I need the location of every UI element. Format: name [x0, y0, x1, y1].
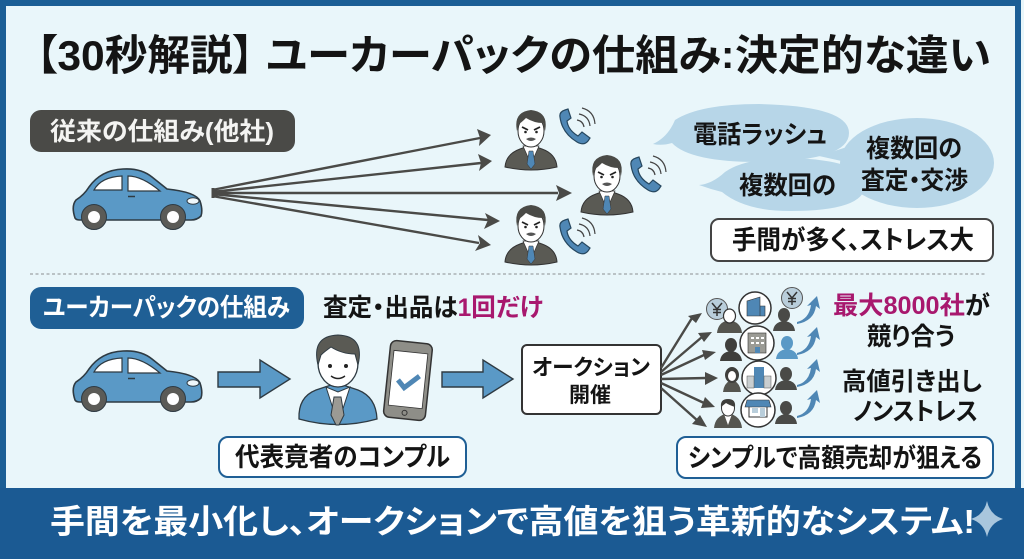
icon: rising arrow [797, 359, 820, 387]
title: 決定的な違い [735, 32, 991, 79]
icon: rising arrow [797, 390, 820, 418]
icon: office building [739, 292, 771, 324]
arrows: to many dealers [212, 129, 572, 251]
callout: troublesome and stressful [711, 219, 993, 261]
speech bubble: multiple appraisals and negotiation: 複数回の [866, 135, 962, 163]
title: 【30秒解説】 [36, 32, 254, 79]
callout: representative [219, 437, 466, 477]
icon: phone 1 [560, 108, 595, 144]
buyers row 1 [706, 288, 820, 333]
bottom banner [0, 488, 1024, 559]
icon: stressed sales person 1 [505, 110, 557, 170]
icon: office building [740, 326, 774, 360]
heading pill: Ucar-Pack system [30, 287, 304, 329]
panel: Ucar-Pack system [30, 287, 993, 478]
icon: car [73, 169, 202, 230]
icon: buyer silhouette blue [776, 336, 798, 359]
text: up to 8000 companies compete: 競り合う [867, 323, 955, 351]
icon: buyer silhouette [773, 308, 795, 331]
icon: buyer silhouette [775, 367, 797, 390]
subheading: one-time appraisal: 査定・出品は1回だけ [323, 294, 543, 322]
icon: smartphone with check [383, 340, 433, 421]
icon: yen coin [706, 298, 728, 320]
icon: smiling agent [299, 335, 377, 425]
auction box: オークション [532, 355, 650, 380]
icon: rising arrow [797, 296, 820, 324]
arrow: agent to auction [442, 360, 513, 398]
bottom banner: 手間を最小化し、オークションで高値を狙う革新的なシステム! [50, 503, 975, 540]
icon: rising arrow [797, 327, 820, 355]
heading pill: Ucar-Pack system: ユーカーパックの仕組み [43, 294, 290, 322]
speech bubble: multiple appraisals and negotiation: 査定・交渉 [861, 167, 968, 195]
heading pill: conventional [30, 110, 295, 152]
icon: stressed sales person 2 [581, 155, 633, 215]
icon: sparkle [971, 501, 1003, 537]
speech bubble: phone rush [653, 104, 849, 162]
icon: suited buyer [714, 399, 742, 428]
speech bubble: phone rush: 電話ラッシュ [693, 121, 827, 149]
icon: car [73, 351, 202, 412]
icon: phone 2 [631, 156, 666, 192]
buyers row 3 [723, 359, 820, 395]
arrows: auction to buyers [661, 313, 718, 427]
icon: buyer silhouette [720, 338, 742, 361]
icon: buyer silhouette [775, 401, 797, 424]
callout: troublesome and stressful: 手間が多く、ストレス大 [732, 225, 974, 255]
title [36, 32, 991, 79]
buyers row 2 [720, 326, 820, 361]
text: high price, no stress: ノンストレス [853, 398, 978, 426]
icon: woman buyer [723, 367, 741, 392]
heading pill: conventional: 従来の仕組み(他社) [50, 118, 274, 146]
text: up to 8000 companies compete [833, 291, 990, 351]
icon: apartment building [742, 361, 776, 395]
text: up to 8000 companies compete: 最大8000社が [833, 291, 990, 320]
callout: simple and high price [677, 437, 993, 478]
text: high price, no stress: 高値引き出し [842, 368, 982, 396]
callout: representative: 代表竟者のコンプル [235, 442, 450, 472]
title: ユーカーパックの仕組み [266, 32, 721, 79]
title: : [721, 33, 734, 77]
auction box: 開催 [569, 384, 611, 407]
icon: storefront [741, 393, 775, 427]
buyers row 4 [714, 390, 820, 428]
speech bubble: multiple appraisals and negotiation [819, 118, 994, 208]
icon: yen coin [782, 288, 802, 308]
text: high price, no stress [842, 368, 982, 426]
speech bubble: multiple times [699, 158, 865, 211]
icon: phone 3 [560, 218, 595, 254]
icon: buyer [717, 309, 742, 333]
icon: stressed sales person 3 [505, 205, 557, 265]
speech bubble: multiple times: 複数回の [739, 172, 836, 200]
arrow: car to agent [218, 360, 290, 398]
callout: simple and high price: シンプルで高額売却が狙える [688, 443, 982, 473]
auction box [522, 345, 661, 414]
panel: conventional system [30, 104, 994, 265]
